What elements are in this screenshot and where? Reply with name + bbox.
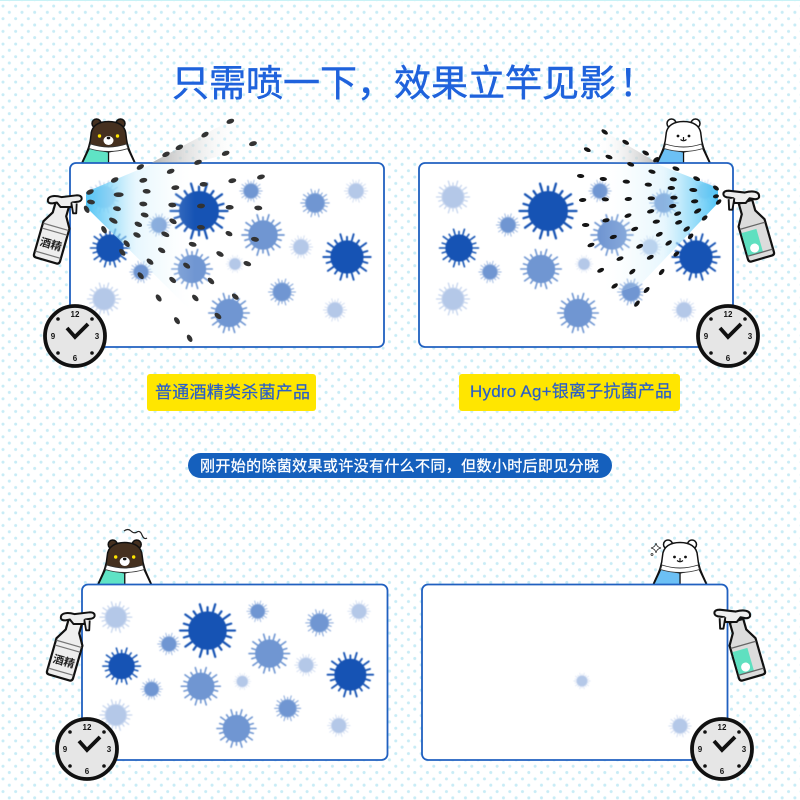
bottle: alcohol top [33,195,82,264]
label: Hydro Ag+ product [459,374,680,411]
label: alcohol product [147,374,316,411]
clock: bottom-left: 3 [107,745,112,754]
bear: brown bottom-left [98,540,152,585]
clock: bottom-left: 9 [63,745,68,754]
clock: top-right [698,306,758,366]
clock: top-left: 12 [71,310,80,319]
panel: alcohol product, hours later [82,584,388,760]
panel: Hydro Ag+ product, hours later [422,584,728,760]
clock: bottom-right: 12 [718,723,727,732]
panel: alcohol product, spraying [70,163,384,347]
clock: top-right: 9 [704,332,709,341]
bottle: alcohol bottom [46,612,95,681]
bottle: Hydro Ag+ bottom [714,610,766,681]
sparkle [651,543,661,556]
bear: white bottom-right [653,540,707,585]
clock: bottom-left: 12 [83,723,92,732]
bottle: alcohol bottom: 酒精 [51,651,76,671]
label: Hydro Ag+ product: Hydro Ag+银离子抗菌产品 [470,382,672,401]
clock: top-left: 6 [73,354,78,363]
callout pill [188,453,612,478]
clock: top-left: 3 [95,332,100,341]
clock: bottom-right [692,719,752,779]
bottle: alcohol top: 酒精 [38,234,63,254]
bottle: Hydro Ag+ top [723,191,775,262]
worry squiggle [124,530,147,539]
spray cone: left [86,121,243,320]
callout pill: 刚开始的除菌效果或许没有什么不同，但数小时后即见分晓 [200,458,599,475]
panel: Hydro Ag+ product, spraying [419,163,733,347]
clock: top-right: 6 [726,354,731,363]
spray cone: right [595,131,718,300]
spray droplets: left [83,118,265,342]
bear: white top-right [656,119,710,164]
clock: bottom-right: 3 [742,745,747,754]
clock: top-right: 3 [748,332,753,341]
title: 只需喷一下，效果立竿见影！ [172,63,656,104]
clock: bottom-left: 6 [85,767,90,776]
label: alcohol product: 普通酒精类杀菌产品 [155,383,310,402]
clock: bottom-left [57,719,117,779]
clock: bottom-right: 9 [698,745,703,754]
clock: top-left [45,306,105,366]
clock: bottom-right: 6 [720,767,725,776]
spray droplets: right [577,129,722,307]
clock: top-left: 9 [51,332,56,341]
bear: brown top-left [82,119,136,164]
clock: top-right: 12 [724,310,733,319]
